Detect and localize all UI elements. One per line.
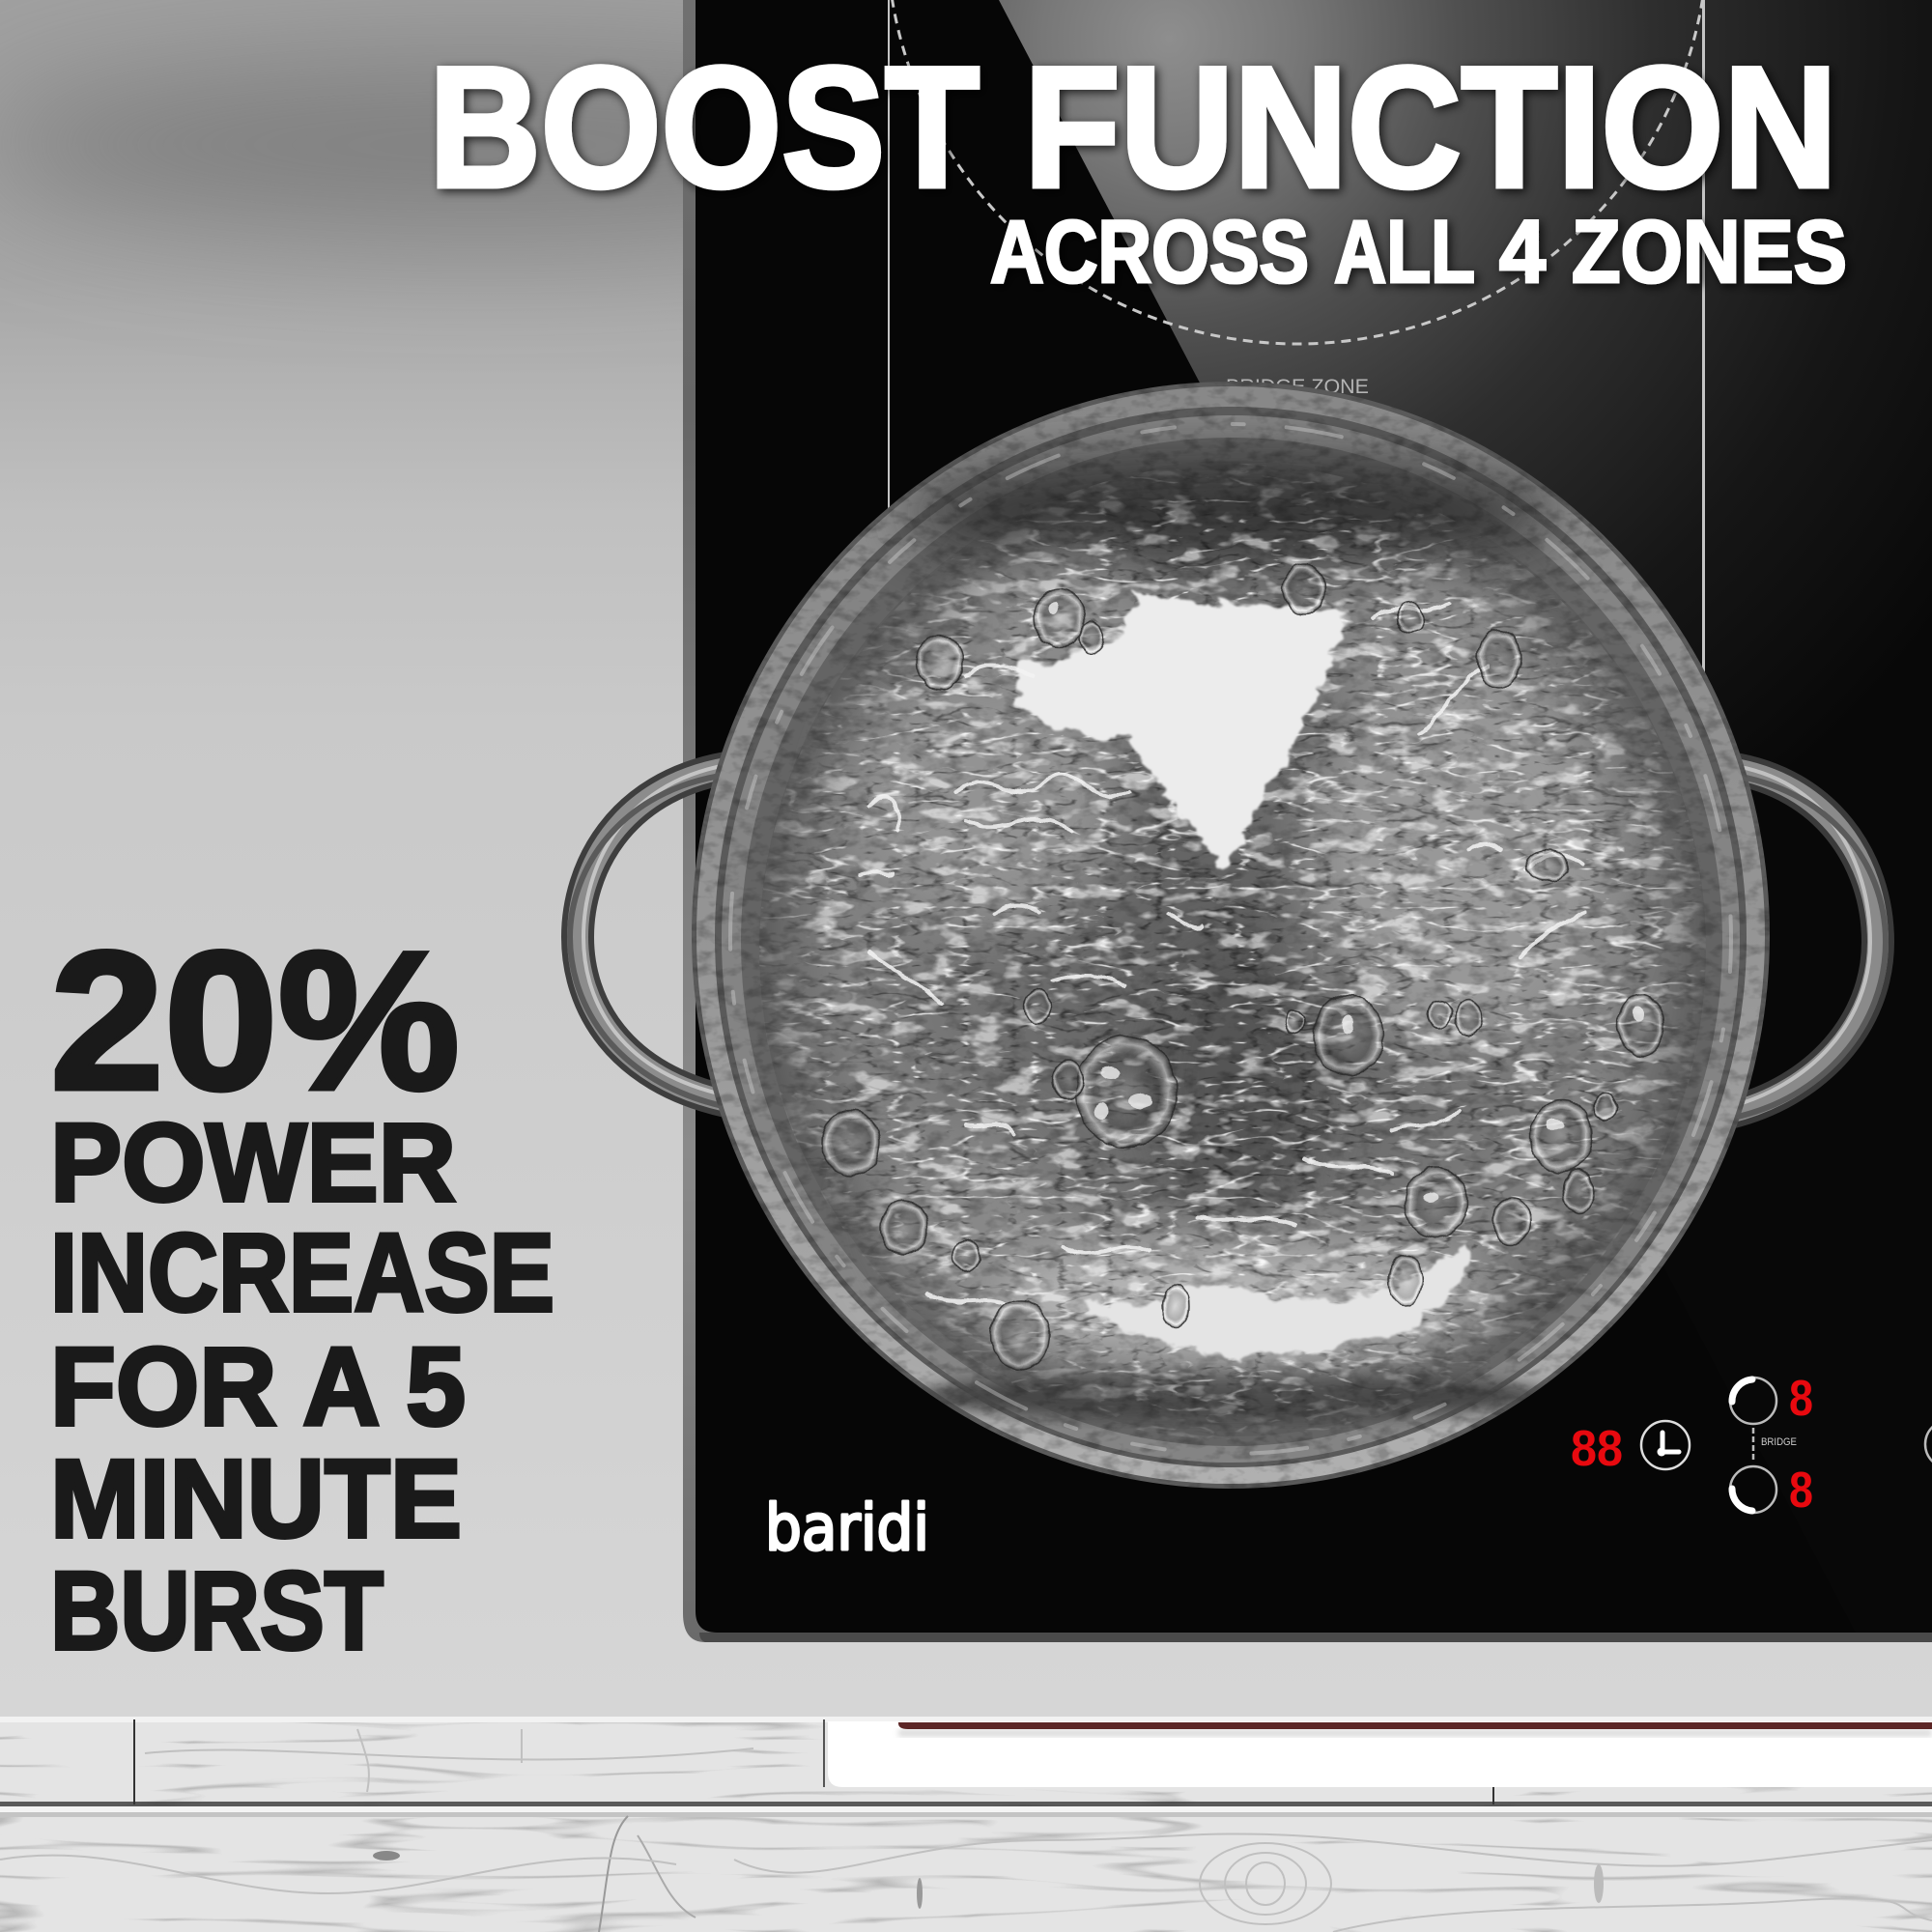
- callout text lines: MINUTE: [50, 1437, 462, 1561]
- bubbles: [822, 564, 1664, 1370]
- pot outer rim: [692, 382, 1770, 1489]
- zone guide lines: [888, 0, 1705, 676]
- upper zone digit: 8: [1789, 1371, 1813, 1427]
- title: Boost Function: [429, 31, 1847, 301]
- water light patches: [850, 560, 1613, 1357]
- bridge zone label: BRIDGE ZONE: [1226, 376, 1369, 398]
- lower zone digit: 8: [1789, 1463, 1813, 1519]
- heading line 2: ALL: [1334, 203, 1475, 301]
- icon: left pot handle: [570, 765, 726, 1107]
- panel: boiling pot seen from above: [692, 382, 1770, 1489]
- icon: clock: [1641, 1421, 1690, 1469]
- panel: induction hob glass: [683, 0, 1932, 1642]
- callout text lines: POWER: [50, 1101, 456, 1225]
- heading line 1: BOOST: [429, 31, 980, 223]
- icon: cropped control ring: [1925, 1420, 1932, 1468]
- white glare V at top of water: [1016, 591, 1349, 867]
- icon: upper bridge knob: [1730, 1378, 1776, 1424]
- heading line 2: ACROSS: [990, 203, 1309, 301]
- white glare at bottom of water: [1082, 1246, 1469, 1355]
- heading line 2: ZONES: [1572, 203, 1847, 301]
- big percentage: 20%: [50, 911, 460, 1131]
- panel: wooden floor planks: [0, 1717, 1932, 1932]
- icon: right pot handle: [1729, 765, 1886, 1119]
- callout text lines: BURST: [50, 1549, 384, 1673]
- heading line 2: [990, 203, 1847, 301]
- callout: 20% power increase: [50, 911, 554, 1673]
- dashed cooking zone: [887, 0, 1708, 344]
- bridge link: [1752, 1428, 1754, 1462]
- logo: baridi: baridi: [765, 1491, 929, 1565]
- panel: touch controls: [1571, 1371, 1932, 1519]
- metal texture on rim: [692, 382, 1770, 1489]
- icon: lower bridge knob: [1730, 1466, 1776, 1513]
- pot wall shading: [904, 459, 1561, 565]
- panel: white drawer front: [828, 1718, 1932, 1787]
- hob black glass: [696, 0, 1932, 1633]
- water surface: [692, 382, 1770, 1489]
- heading line 2: 4: [1499, 203, 1546, 301]
- heading line 1: FUNCTION: [1024, 31, 1837, 223]
- heading line 1: [429, 31, 1837, 223]
- timer display: 88: [1571, 1421, 1623, 1477]
- glass reflection wedge: [999, 0, 1932, 701]
- hob metal edge: [683, 0, 1932, 1642]
- callout text lines: FOR A 5: [50, 1325, 466, 1449]
- callout text lines: INCREASE: [50, 1211, 554, 1335]
- bright ripple strokes: [860, 604, 1584, 1304]
- water caustic ripples: [753, 454, 1710, 1439]
- bridge label: BRIDGE: [1761, 1436, 1797, 1448]
- callout text lines: [50, 1101, 554, 1673]
- pot rim glints: [730, 424, 1731, 1454]
